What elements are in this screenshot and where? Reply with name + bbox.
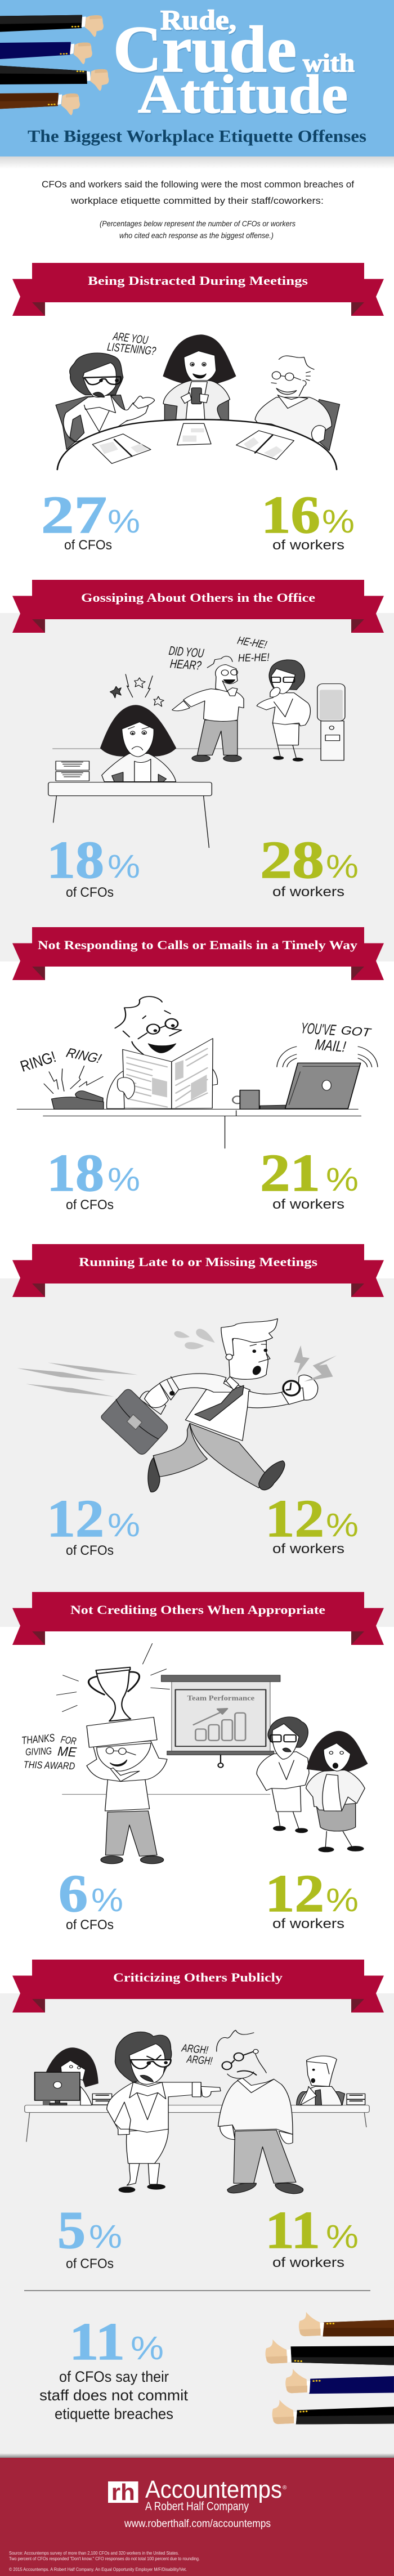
stat: 28% workers	[260, 831, 359, 900]
illustration: running businessman	[17, 1319, 337, 1492]
torso	[145, 1374, 318, 1441]
speech: are you listening	[106, 329, 157, 357]
binder right	[236, 431, 294, 459]
screen heading: Team Performance	[187, 1694, 254, 1702]
stat: 12% workers: %	[326, 1882, 359, 1918]
ribbon heading: gossiping: Gossiping About Others in the Office	[81, 591, 315, 605]
stat: 18% CFOs: of CFOs	[66, 885, 114, 900]
icon: wristwatch	[283, 1381, 300, 1396]
stat: 11% workers: %	[326, 2219, 359, 2255]
person: angry woman pointing	[107, 2032, 221, 2193]
stat: 18% CFOs: %	[108, 1161, 140, 1198]
source notes: © 2015 Accountemps. A Robert Half Company. An Equal Opportunity Employer M/F/Disability/Vet.	[9, 2566, 187, 2572]
illustration: gossip at desk	[48, 634, 345, 848]
icon: thumbs-down arms	[0, 15, 109, 115]
ribbon heading: not responding: Not Responding to Calls or Emails in a Timely Way	[38, 938, 357, 952]
stat: 12% workers: 12	[265, 1490, 324, 1548]
stat: 12% CFOs	[47, 1490, 140, 1558]
callout text: etiquette breaches	[55, 2405, 173, 2422]
brand name: A Robert Half Company	[145, 2500, 249, 2513]
ribbon heading: gossiping	[12, 580, 384, 633]
stat: 11% no breaches: %	[131, 2330, 164, 2367]
icon: tray left	[92, 2094, 112, 2105]
person: pointing man	[172, 656, 244, 762]
sweat drops	[174, 1329, 215, 1349]
intro text: (Percentages below represent the number of CFOs or workers	[100, 220, 296, 228]
stat: 18% CFOs: %	[108, 848, 140, 885]
speech: thanks for giving me this award: FOR	[60, 1734, 77, 1747]
speech: thanks for giving me this award: THANKS	[21, 1732, 56, 1747]
title: Rude,	[160, 4, 236, 35]
speech: argh: ARGH!	[180, 2042, 209, 2056]
stat: 18% CFOs: of CFOs	[66, 1197, 114, 1213]
speech: did you hear: DID YOU	[168, 644, 205, 660]
person: gossiping woman	[257, 660, 310, 761]
brand name: Accountemps	[145, 2476, 282, 2503]
title	[113, 4, 355, 125]
stat: 5% CFOs: 5	[57, 2201, 86, 2260]
speed lines	[17, 1362, 138, 1397]
trousers and shoes	[148, 1423, 285, 1492]
icon: tray right	[347, 2094, 365, 2105]
person: angry woman	[64, 353, 155, 442]
speech: did you hear	[168, 644, 205, 673]
speech: thanks for giving me this award: THIS AWARD	[23, 1760, 75, 1772]
speech: he-he	[236, 634, 270, 664]
icon: stars and lightning	[110, 674, 164, 706]
speech: he-he: HE-HE!	[236, 634, 268, 651]
title: with	[303, 48, 355, 77]
callout text: staff does not commit	[39, 2387, 189, 2404]
illustration: meeting table	[56, 329, 340, 469]
stat: 5% CFOs: of CFOs	[66, 2256, 114, 2271]
intro text: who cited each response as the biggest offense.)	[119, 231, 274, 240]
stat: 6% CFOs: of CFOs	[66, 1917, 114, 1933]
person: annoyed woman	[101, 705, 176, 782]
illustration: public criticism	[25, 2030, 369, 2194]
stat: 27% CFOs: of CFOs	[64, 538, 112, 553]
head	[221, 1319, 277, 1379]
stat: 28% workers: %	[326, 848, 359, 885]
stat: 12% workers: 12	[265, 1864, 324, 1923]
icon: laptop	[260, 1046, 378, 1109]
illustration: man reading newspaper	[16, 996, 378, 1148]
stat: 11% no breaches	[39, 2313, 189, 2422]
speech: you've got mail	[300, 1019, 373, 1056]
stat: 28% workers: 28	[260, 831, 324, 889]
background desk	[25, 2105, 369, 2141]
brand name: ®	[283, 2485, 287, 2491]
person: man at desk	[297, 2056, 344, 2105]
stat: 12% CFOs: of CFOs	[66, 1543, 114, 1558]
icon: water cooler	[317, 684, 345, 761]
icon: ringing phone: RING!	[64, 1045, 104, 1066]
binder left	[92, 434, 151, 463]
header panel	[0, 0, 394, 169]
stat: 16% workers	[261, 486, 355, 553]
stat: 6% CFOs	[59, 1864, 123, 1933]
stat: 11% workers: of workers	[272, 2255, 344, 2270]
speech: thanks for giving me this award: ME	[57, 1744, 78, 1760]
stat: 6% CFOs: 6	[59, 1864, 88, 1923]
icon: alarm lightning	[294, 1345, 337, 1381]
speech: he-he: HE-HE!	[238, 651, 270, 664]
stat: 21% workers	[260, 1144, 359, 1212]
tray stack	[56, 761, 89, 781]
icon: briefcase	[101, 1389, 168, 1454]
person: man with newspaper	[107, 996, 217, 1108]
stat: 12% CFOs: %	[108, 1507, 140, 1544]
stat: 12% workers	[265, 1864, 359, 1931]
intro text	[42, 179, 354, 240]
stat: 18% CFOs: 18	[47, 1144, 104, 1202]
stat: 27% CFOs: %	[108, 503, 140, 540]
stat: 5% CFOs: %	[89, 2219, 122, 2255]
stat: 12% workers: of workers	[272, 1541, 344, 1557]
stat: 21% workers: %	[326, 1161, 359, 1198]
speech: thanks for giving me this award: GIVING	[25, 1746, 52, 1758]
logo mark: rh	[111, 2479, 135, 2505]
stat: 28% workers: of workers	[272, 884, 344, 900]
speech: argh: ARGH!	[185, 2053, 213, 2067]
bar chart icon	[194, 1709, 245, 1741]
speech: argh	[180, 2042, 213, 2067]
stat: 5% CFOs	[57, 2201, 122, 2271]
person: woman on phone	[163, 335, 236, 419]
ribbon heading: not crediting	[12, 1592, 384, 1645]
person: woman behind laptop	[35, 2048, 98, 2105]
source notes	[9, 2550, 200, 2572]
stat: 18% CFOs	[47, 1144, 140, 1213]
ribbon heading: distracted: Being Distracted During Meetings	[88, 274, 308, 288]
ribbon heading: criticizing: Criticizing Others Publicly	[113, 1970, 283, 1984]
stat: 12% CFOs: 12	[47, 1490, 104, 1548]
speech: thanks for giving me this award	[21, 1732, 78, 1772]
trophy rays	[56, 1644, 169, 1712]
speech: you've got mail: YOU'VE	[300, 1019, 337, 1039]
ribbon heading: running late	[12, 1244, 384, 1297]
icon: trophy	[88, 1667, 140, 1721]
intro text: workplace etiquette committed by their staff/coworkers:	[70, 195, 324, 206]
person: glasses man	[255, 356, 332, 443]
ribbon heading: not responding	[12, 927, 384, 980]
stat: 18% CFOs	[47, 831, 140, 900]
illustration: taking the trophy	[21, 1644, 368, 1864]
projection screen	[162, 1675, 280, 1768]
source notes: Two percent of CFOs responded "Don't know." CFO responses do not total 100 percent due to rounding.	[9, 2556, 200, 2561]
stat: 27% CFOs	[41, 486, 140, 553]
stat: 12% workers: %	[326, 1507, 359, 1544]
person: scolded man	[217, 2030, 303, 2194]
stat: 21% workers: 21	[260, 1144, 320, 1202]
website: www.roberthalf.com/accountemps	[124, 2518, 271, 2530]
person: curly haired woman	[257, 1717, 309, 1833]
stat: 6% CFOs: %	[91, 1882, 123, 1918]
ribbon heading: running late: Running Late to or Missing Meetings	[79, 1255, 318, 1269]
stat: 12% workers	[265, 1490, 359, 1557]
stat: 11% no breaches: 11	[69, 2313, 125, 2371]
stat: 11% workers	[265, 2201, 359, 2270]
stat: 21% workers: of workers	[272, 1197, 344, 1212]
icon: thumbs-up arms	[266, 2312, 394, 2425]
person: man holding trophy	[87, 1741, 167, 1864]
speech: are you listening: ARE YOU	[111, 329, 149, 347]
speech: are you listening: LISTENING?	[106, 340, 157, 357]
ribbon heading: criticizing	[12, 1960, 384, 2012]
speech: you've got mail: GOT	[340, 1024, 373, 1040]
stat: 18% CFOs: 18	[47, 831, 104, 889]
source notes: Source: Accountemps survey of more than 2,100 CFOs and 320 workers in the United States.	[9, 2550, 179, 2556]
footer panel	[0, 2453, 394, 2576]
intro text: CFOs and workers said the following were the most common breaches of	[42, 179, 354, 190]
speech: you've got mail: MAIL!	[314, 1036, 347, 1056]
stat: 11% workers: 11	[265, 2201, 320, 2260]
icon: ringing phone: RING!	[16, 1048, 60, 1075]
ribbon heading: distracted	[12, 263, 384, 316]
binder centre	[177, 423, 211, 445]
ribbon heading: not crediting: Not Crediting Others When Appropriate	[70, 1603, 325, 1617]
icon: ringing phone	[16, 1045, 104, 1109]
stat: 12% workers: of workers	[272, 1916, 344, 1931]
stat: 16% workers: 16	[261, 486, 320, 544]
subtitle: The Biggest Workplace Etiquette Offenses	[28, 126, 366, 146]
speech: did you hear: HEAR?	[169, 657, 202, 673]
desk lines	[17, 1109, 361, 1148]
box under trophy	[87, 1717, 157, 1747]
table	[57, 419, 337, 469]
callout text: of CFOs say their	[59, 2368, 169, 2385]
desk	[48, 782, 212, 848]
stat: 16% workers: %	[322, 503, 355, 540]
callout text	[39, 2368, 189, 2422]
stat: 27% CFOs: 27	[41, 486, 107, 544]
person: dark haired woman	[306, 1731, 368, 1852]
title: Crude	[113, 12, 297, 86]
title: Attitude	[138, 64, 348, 125]
stat: 16% workers: of workers	[272, 538, 344, 553]
icon: mug	[232, 1090, 259, 1109]
